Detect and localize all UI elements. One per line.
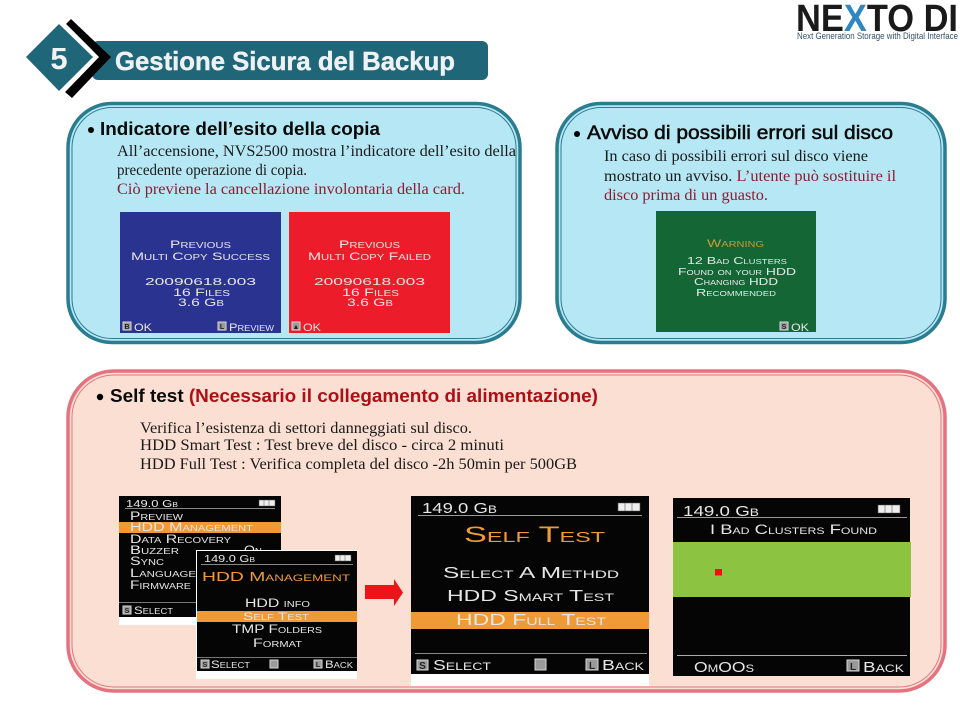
screen: self test method: HDD Smart Test: [447, 588, 614, 605]
screen: HDD management menu: L: [316, 662, 321, 669]
screen: copy failed: Previous: [339, 239, 400, 251]
body text: Ciò previene la cancellazione involontaria della card.: [117, 181, 465, 198]
white chevron gap: [58, 24, 99, 92]
screen: self test method: 149.0 Gb: [422, 500, 497, 517]
progress bar: [673, 542, 911, 597]
screen: copy success: B: [124, 324, 130, 331]
body text: mostrato un avviso. L’utente può sostituire il: [604, 168, 896, 185]
screen: bad clusters result: Back: [863, 659, 905, 676]
screen: copy failed: 3.6 Gb: [347, 297, 393, 309]
screen: copy failed: ▲: [293, 324, 299, 331]
screen: main menu: Buzzer: [130, 545, 179, 557]
section number: 5: [50, 41, 68, 76]
screen: bad cluster warning: S: [782, 324, 787, 331]
panel: disk error warning: [557, 104, 945, 342]
heading: Avviso di possibili errori sul disco: [587, 123, 893, 144]
bullet: [88, 127, 94, 133]
screen: self test method: Select A Methdd: [443, 565, 619, 582]
panel: copy result indicator: [68, 104, 520, 342]
body text: Verifica l’esistenza di settori danneggiati sul disco.: [140, 420, 472, 437]
screen: self test method: L: [589, 661, 595, 672]
screen: main menu: Data Recovery: [130, 534, 232, 546]
screen: self test method: Back: [602, 657, 645, 674]
screen: bad cluster warning: [656, 211, 816, 334]
title bar: [92, 41, 488, 80]
screen: main menu: Preview: [130, 511, 184, 523]
panel: self test: [68, 371, 945, 691]
screen: bad cluster warning: Warning: [707, 238, 764, 250]
screen: HDD management menu: Self Test: [243, 611, 309, 623]
screen: main menu: HDD Management: [130, 522, 253, 534]
body text: precedente operazione di copia.: [117, 162, 307, 179]
screen: copy failed: Multi Copy Failed: [308, 251, 431, 263]
bullet: [97, 394, 103, 400]
title: Gestione Sicura del Backup: [115, 46, 455, 76]
screen: copy success: [120, 212, 281, 334]
screen: copy success: 16 Files: [173, 287, 230, 299]
screen: main menu: Firmware: [130, 580, 191, 592]
screen: HDD management menu: HDD Management: [202, 569, 351, 584]
screen: bad cluster warning: Found on your HDD: [678, 266, 797, 278]
screen: main menu: Select: [134, 605, 173, 617]
screen: bad cluster warning: 12 Bad Clusters: [687, 255, 787, 267]
screen: bad clusters result: I Bad Clusters Found: [710, 522, 878, 537]
black chevron: [65, 19, 111, 98]
screen: copy success: L: [220, 324, 225, 331]
screen: HDD management menu: Select: [211, 659, 250, 671]
arrow: [365, 579, 403, 606]
screen: self test method: HDD Full Test: [456, 612, 606, 629]
screen: main menu: [119, 496, 281, 625]
body text: HDD Full Test : Verifica completa del disco -2h 50min per 500GB: [140, 456, 577, 473]
screen: self test method: Select: [433, 657, 491, 674]
screen: bad cluster warning: Recommended: [696, 287, 776, 299]
screen: bad clusters result: L: [850, 662, 856, 673]
screen: bad cluster warning: Changing HDD: [694, 276, 779, 288]
body text: All’accensione, NVS2500 mostra l’indicatore dell’esito della: [117, 143, 516, 160]
bad cluster marker: [715, 569, 722, 576]
screen: self test method: [411, 496, 649, 686]
screen: HDD management menu: HDD info: [245, 598, 310, 610]
body text: In caso di possibili errori sul disco viene: [604, 148, 868, 165]
body text: [604, 148, 896, 204]
screen: bad clusters result: 149.0 Gb: [683, 503, 759, 520]
screen: copy success: Multi Copy Success: [131, 251, 270, 263]
screen: copy failed: 20090618.003: [314, 277, 426, 288]
number diamond: [26, 24, 93, 91]
screen: HDD management menu: Format: [253, 638, 302, 650]
screen: copy success: Preview: [229, 322, 275, 334]
body text: HDD Smart Test : Test breve del disco - circa 2 minuti: [140, 437, 505, 454]
screen: copy failed: OK: [303, 322, 322, 334]
screen: main menu: S: [125, 608, 130, 615]
screen: bad clusters result: [673, 498, 911, 676]
heading: Self test (Necessario il collegamento di alimentazione): [110, 386, 598, 406]
screen: main menu: Language: [130, 568, 196, 580]
heading: Indicatore dell’esito della copia: [100, 118, 381, 139]
screen: bad clusters result: OmOOs: [694, 659, 754, 676]
screen: copy failed: [289, 212, 450, 334]
body text: disco prima di un guasto.: [604, 187, 768, 204]
screen: HDD management menu: Back: [325, 659, 354, 671]
screen: copy success: 3.6 Gb: [178, 297, 224, 309]
screen: main menu: Sync: [130, 556, 164, 568]
body text: [140, 420, 577, 473]
screen: self test method: S: [419, 661, 426, 672]
bullet: [574, 131, 580, 137]
screen: copy success: 20090618.003: [145, 277, 257, 288]
screen: copy success: OK: [134, 322, 153, 334]
screen: copy failed: 16 Files: [342, 287, 399, 299]
screen: copy success: Previous: [170, 239, 231, 251]
screen: main menu: On: [244, 545, 262, 557]
screen: HDD management menu: 149.0 Gb: [204, 553, 255, 565]
screen: self test method: Self Test: [464, 522, 605, 547]
screen: HDD management menu: TMP Folders: [232, 624, 322, 636]
body text: [117, 143, 516, 198]
section header: [26, 19, 488, 98]
screen: HDD management menu: S: [203, 662, 208, 669]
screen: bad cluster warning: OK: [791, 322, 810, 334]
screen: main menu: 149.0 Gb: [126, 498, 178, 510]
screen: HDD management menu: [196, 550, 357, 679]
